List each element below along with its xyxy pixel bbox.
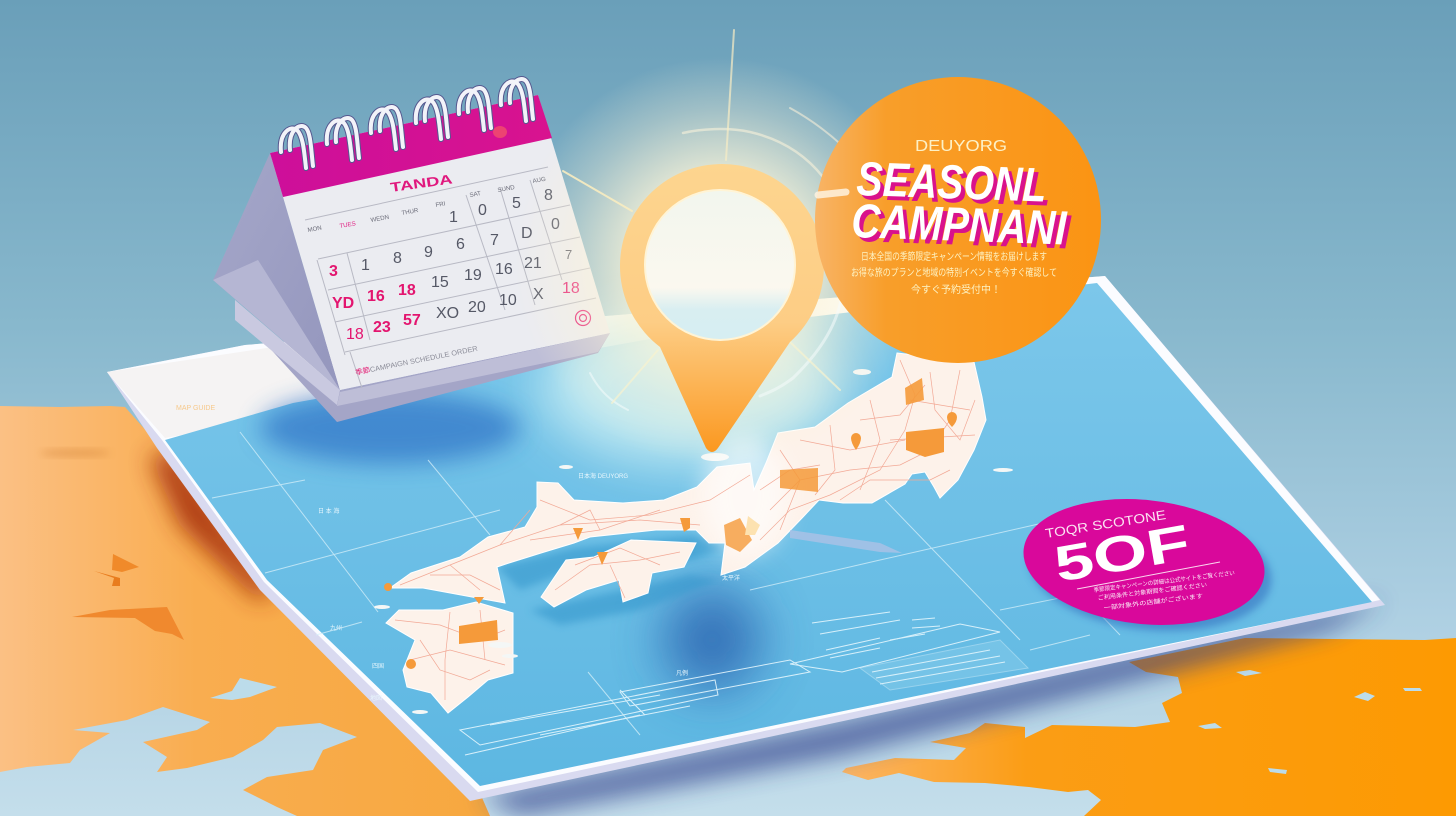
calendar dates: 15 xyxy=(431,274,449,291)
folded map sheet xyxy=(107,276,1385,801)
calendar weekday labels: SAT xyxy=(469,190,482,199)
badge description: お得な旅のプランと地域の特別イベントを今すぐ確認して xyxy=(851,266,1057,279)
calendar weekday labels xyxy=(307,176,547,234)
drop shadow under pin xyxy=(662,588,762,692)
calendar dates: X xyxy=(533,286,544,303)
sun glow xyxy=(515,57,925,467)
discount fine print: 一部対象外の店舗がございます xyxy=(1103,592,1203,612)
calendar base xyxy=(235,310,610,422)
badge title xyxy=(851,153,1069,256)
badge disc xyxy=(815,77,1101,363)
badge title: CAMPNANI xyxy=(851,195,1069,256)
discount eyebrow: TOQR SCOTONE xyxy=(1044,507,1167,541)
map ocean labels: 日本海 DEUYORG xyxy=(578,472,628,480)
discount shadow xyxy=(1022,498,1278,642)
calendar pink header xyxy=(270,95,552,197)
calendar weekday labels: SUND xyxy=(497,184,516,194)
calendar dates xyxy=(361,187,572,322)
map ocean labels: 四国 xyxy=(372,663,384,670)
arrow on map xyxy=(790,530,902,553)
calendar month title: TANDA xyxy=(389,171,454,195)
road network xyxy=(395,360,975,700)
Shikoku island xyxy=(541,540,696,607)
calendar highlighted dates: 18 xyxy=(346,326,364,343)
calendar rings xyxy=(281,79,533,168)
calendar dates: XO xyxy=(436,305,459,322)
discount disc xyxy=(1017,488,1271,636)
calendar dates: D xyxy=(521,225,533,242)
calendar dates: 7 xyxy=(565,247,572,262)
calendar footer note: 季節CAMPAIGN SCHEDULE ORDER xyxy=(354,344,478,377)
calendar dates: 7 xyxy=(490,232,499,249)
calendar highlighted dates: 23 xyxy=(373,319,391,336)
calendar dates: 21 xyxy=(524,255,542,272)
calendar weekday labels: FRI xyxy=(435,200,446,209)
calendar back stand xyxy=(213,153,340,390)
orange landmass bottom left xyxy=(0,406,490,816)
small islands xyxy=(374,369,1013,714)
calendar dates: 0 xyxy=(551,216,560,233)
calendar dates: 19 xyxy=(464,267,482,284)
calendar highlighted dates: 18 xyxy=(562,280,580,297)
discount fine print: ご利用条件と対象期間をご確認ください xyxy=(1097,581,1207,602)
map shadow xyxy=(480,600,1385,816)
map ocean labels: 九州 xyxy=(330,624,342,632)
glow rings and rays xyxy=(563,30,880,410)
map ocean labels: 地図 xyxy=(370,694,382,702)
map ocean labels: 凡例 xyxy=(676,669,688,677)
map ocean labels: 太平洋 xyxy=(722,574,740,582)
map ocean labels xyxy=(318,472,740,702)
calendar seal icon xyxy=(576,310,590,326)
Kyushu island xyxy=(386,602,513,713)
calendar weekday labels: WEDN xyxy=(370,214,390,224)
calendar shadow on map xyxy=(260,392,520,464)
calendar weekday labels: THUR xyxy=(401,207,420,217)
calendar dates: 9 xyxy=(424,244,433,261)
calendar dates: 10 xyxy=(499,292,517,309)
badge description: 日本全国の季節限定キャンペーン情報をお届けします xyxy=(861,250,1047,263)
calendar rules xyxy=(305,167,596,388)
location pin xyxy=(620,164,824,452)
calendar highlighted dates: 16 xyxy=(367,288,385,305)
map grid lines xyxy=(212,432,1150,735)
pale light on map below pin xyxy=(540,305,840,465)
calendar dates: 8 xyxy=(544,187,553,204)
map ocean labels: 日 本 海 xyxy=(318,507,339,515)
map location markers xyxy=(384,378,957,669)
calendar dates: 8 xyxy=(393,250,402,267)
calendar weekday labels: TUES xyxy=(339,220,356,230)
calendar dates: 0 xyxy=(478,202,487,219)
map of Japan xyxy=(374,353,1013,714)
badge eyebrow: DEUYORG xyxy=(915,138,1007,155)
calendar dates: 6 xyxy=(456,236,465,253)
orange islands left xyxy=(72,554,184,640)
discount rule xyxy=(1077,562,1220,589)
pin body xyxy=(620,164,824,452)
calendar dates: 1 xyxy=(449,209,458,226)
calendar highlighted dates: 18 xyxy=(398,282,416,299)
map legend tables xyxy=(460,612,1028,755)
calendar dates: 1 xyxy=(361,257,370,274)
discount badge xyxy=(1017,488,1278,642)
pin lens xyxy=(645,190,795,340)
badge description xyxy=(851,250,1057,296)
calendar dates: 20 xyxy=(468,299,486,316)
glow on central Honshu xyxy=(703,435,787,555)
campaign circle badge xyxy=(815,77,1101,363)
badge description: 今すぐ予約受付中！ xyxy=(911,283,1001,296)
calendar highlighted dates: YD xyxy=(332,295,354,312)
calendar page xyxy=(270,95,610,390)
calendar highlighted dates xyxy=(329,263,580,343)
discount value: 5OF xyxy=(1050,514,1194,593)
calendar weekday labels: MON xyxy=(307,225,322,234)
badge title: SEASONL xyxy=(856,153,1047,213)
calendar highlighted dates: 57 xyxy=(403,312,421,329)
calendar weekday labels: AUG xyxy=(532,176,547,185)
Honshu island xyxy=(390,353,986,603)
calendar highlighted dates: 3 xyxy=(329,263,338,280)
discount fine print: 季節限定キャンペーンの詳細は公式サイトをご覧ください xyxy=(1093,569,1235,594)
calendar xyxy=(213,79,610,422)
discount fine print xyxy=(1093,569,1235,612)
calendar dates: 5 xyxy=(512,195,521,212)
orange landmass bottom right xyxy=(842,638,1456,816)
folded map sheet: MAP GUIDE xyxy=(176,405,215,412)
coastal shading xyxy=(497,535,725,625)
calendar dates: 16 xyxy=(495,261,513,278)
